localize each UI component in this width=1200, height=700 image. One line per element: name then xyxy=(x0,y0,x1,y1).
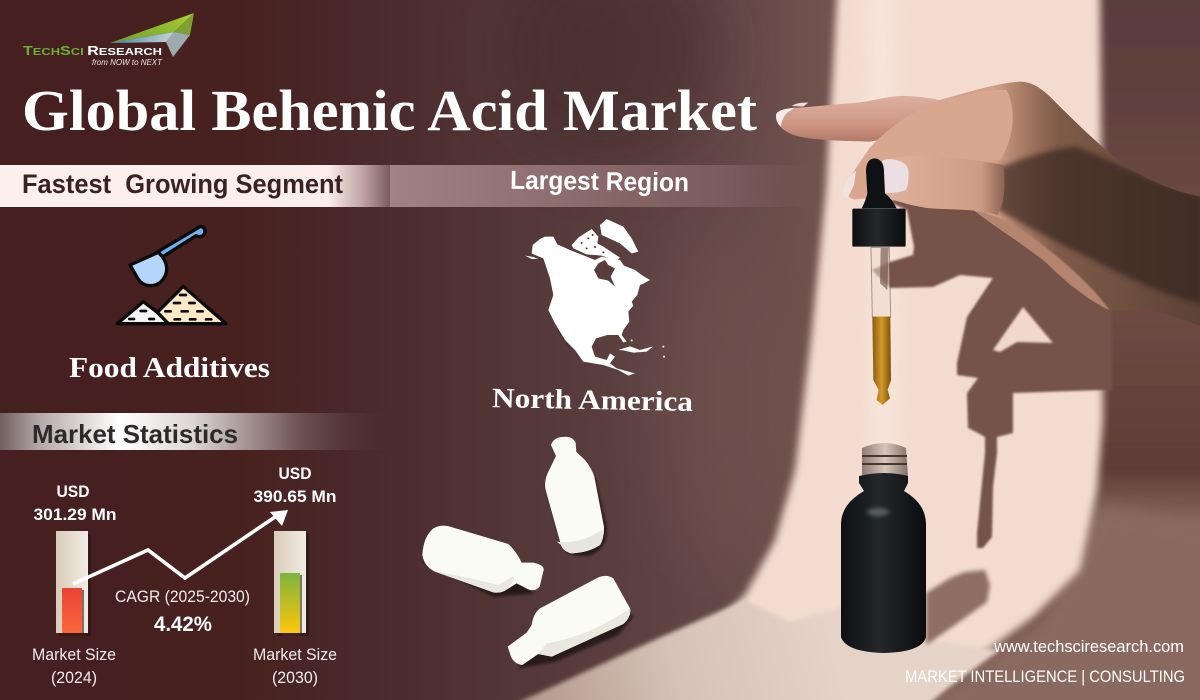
icon: food additive scoop and piles xyxy=(117,227,226,324)
map: north america xyxy=(525,219,665,376)
logo wordmark: TECH SCI RESEARCH xyxy=(23,43,162,58)
back of hand and palm xyxy=(927,82,1200,326)
lit floor xyxy=(515,600,1000,700)
website url: www.techsciresearch.com xyxy=(993,637,1184,656)
value: usd 390.65 mn xyxy=(254,464,336,506)
middle finger and palm xyxy=(844,90,1013,199)
mainland xyxy=(532,237,650,376)
fingernails xyxy=(776,103,909,198)
label: north america: North America xyxy=(492,383,693,418)
photo: black bottle xyxy=(841,443,926,653)
panel: largest region heading: Largest Region xyxy=(510,165,689,197)
panel: fastest growing segment heading xyxy=(0,165,390,207)
dropper oil xyxy=(872,317,891,405)
thumb xyxy=(884,156,1005,215)
panel: largest region heading xyxy=(390,165,815,207)
caribbean xyxy=(618,346,653,353)
label: market size 2024: Market Size xyxy=(32,645,116,664)
island speckle xyxy=(581,234,604,253)
logo: TechSci Research xyxy=(23,13,194,67)
label: market size 2024 xyxy=(32,645,116,687)
arrow: growth trend xyxy=(73,510,288,584)
panel: market statistics xyxy=(0,413,400,687)
index finger xyxy=(777,96,942,142)
arctic islands xyxy=(572,229,620,261)
bottle shadow xyxy=(926,570,990,645)
label: market size 2030: Market Size xyxy=(253,645,337,664)
white bottle: upright xyxy=(545,437,607,556)
label: food additives: Food Additives xyxy=(69,353,270,384)
greenland xyxy=(600,219,638,253)
dropper collar xyxy=(852,209,906,247)
white bottle: lying lower-left xyxy=(508,576,633,668)
white bottle: lying right xyxy=(422,526,544,597)
bar: market size 2024 xyxy=(56,531,91,636)
dropper bulb xyxy=(862,158,897,208)
dropper glass xyxy=(871,247,891,317)
heading: market statistics: Market Statistics xyxy=(32,419,238,449)
light beam on wall and floor xyxy=(700,0,1103,700)
panel: fastest growing segment heading: Fastest Growing Segment xyxy=(22,169,343,199)
label: cagr: CAGR (2025-2030) xyxy=(115,587,250,606)
logo mark xyxy=(110,13,194,57)
label: market size 2024: (2024) xyxy=(51,668,97,687)
baja gulf xyxy=(558,331,570,348)
value: usd 390.65 mn: USD xyxy=(278,464,312,483)
hand shadow on wall xyxy=(872,200,1112,548)
aleutians xyxy=(525,256,538,259)
photo: hand holding dropper xyxy=(776,82,1200,405)
value: usd 390.65 mn: 390.65 Mn xyxy=(254,487,336,506)
value: usd 301.29 mn xyxy=(34,482,116,524)
title: Global Behenic Acid Market xyxy=(22,78,758,143)
label: market size 2030: (2030) xyxy=(272,668,318,687)
logo tagline: from NOW to NEXT xyxy=(92,57,163,67)
hand shading xyxy=(973,147,1200,311)
heading: market statistics xyxy=(0,413,400,450)
value: usd 301.29 mn: USD xyxy=(56,482,90,501)
value: usd 301.29 mn: 301.29 Mn xyxy=(34,505,116,524)
label: market size 2030 xyxy=(253,645,337,687)
bar: market size 2030 xyxy=(274,531,309,636)
value: cagr 4.42%: 4.42% xyxy=(154,613,212,636)
